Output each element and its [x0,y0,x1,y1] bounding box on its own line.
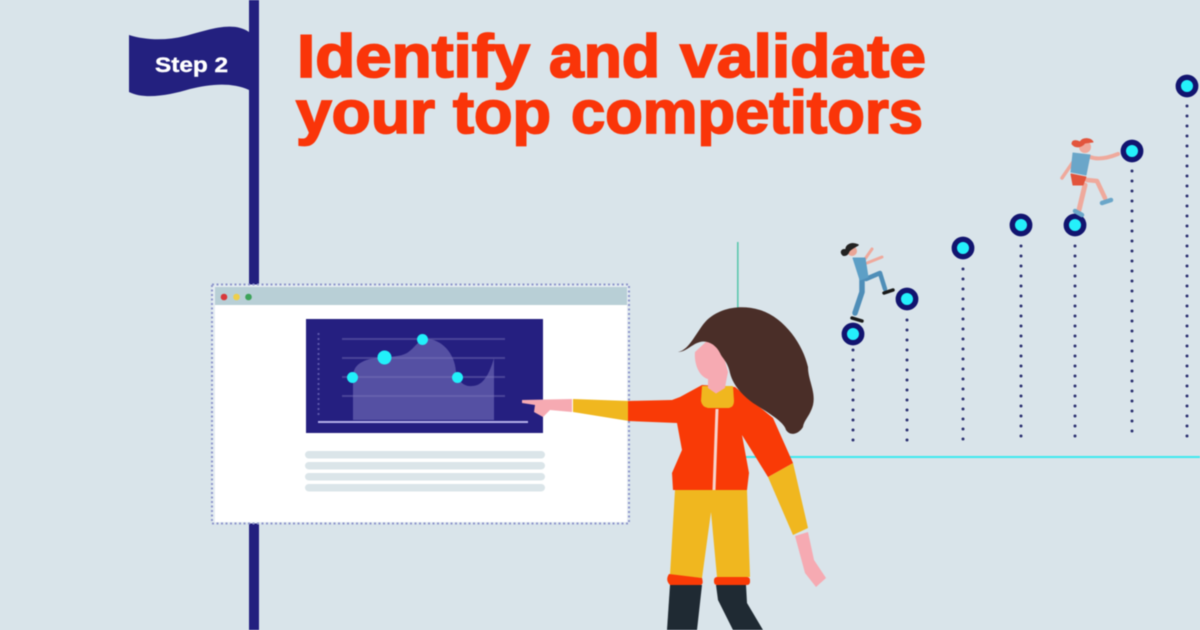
title: your [296,79,435,146]
browser window [212,284,629,524]
title: and [549,23,660,90]
cuffs [667,574,750,585]
window buttons [221,294,252,300]
zipper [714,409,717,490]
title: validate [680,23,926,90]
text placeholder lines [305,451,545,492]
dashboard chart [306,319,543,433]
other hand [795,532,826,587]
flag: step 2 [129,27,249,96]
face and neck [695,340,728,394]
pole [249,0,259,630]
cyan axis line [745,456,1200,458]
flag: step 2: Step 2 [155,54,228,77]
title: top [453,79,551,146]
jacket [628,385,793,490]
trousers [670,490,750,578]
hair [678,307,814,434]
title: Identify [297,23,531,90]
green axis line [737,242,739,312]
woman pointing [522,307,826,630]
browser title bar [215,287,627,305]
sleeve [573,399,629,421]
title [296,23,926,146]
lower sleeve [768,463,808,535]
runner: lower figure [842,244,893,321]
legs [667,585,763,630]
rising chart: dotted stems and nodes [844,77,1196,441]
title: competitors [571,79,923,146]
runner: upper figure [1062,139,1118,215]
pointing hand [522,399,572,417]
collar [701,386,734,408]
